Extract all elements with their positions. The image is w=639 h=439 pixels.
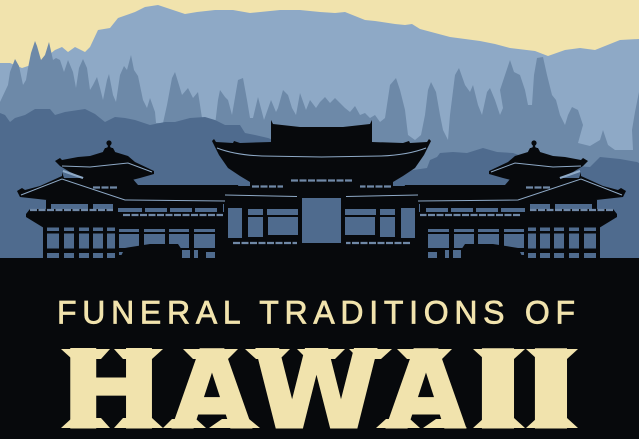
far mountain range [0, 5, 639, 260]
main title [61, 329, 579, 439]
finial [106, 140, 112, 146]
decorative wedge serifs [61, 349, 578, 428]
lower hall openings [47, 198, 322, 258]
central roof [17, 120, 322, 258]
upper gallery openings [51, 204, 88, 209]
foreground mound [120, 244, 182, 258]
mid-ground spire forest [0, 41, 639, 260]
temple left half [17, 120, 322, 258]
roof highlight lines [21, 148, 322, 201]
central doorway [302, 198, 322, 243]
gallery platform [26, 209, 239, 228]
central beam [225, 186, 322, 198]
gallery uprights [46, 200, 51, 212]
central hall frame [224, 196, 304, 258]
foreground tree line [0, 109, 639, 260]
central hall openings [228, 208, 242, 238]
temple silhouette [17, 120, 626, 258]
subtitle: FUNERAL TRADITIONS OF [57, 294, 575, 330]
temple right half (mirror) [321, 120, 626, 258]
ground and title band [0, 258, 639, 439]
railing highlights [30, 180, 322, 243]
wing roof [17, 172, 240, 204]
pavilion upper roof [55, 148, 154, 186]
central hall slanted rail [232, 235, 298, 246]
sky background [0, 0, 639, 300]
lower hall [43, 226, 227, 258]
